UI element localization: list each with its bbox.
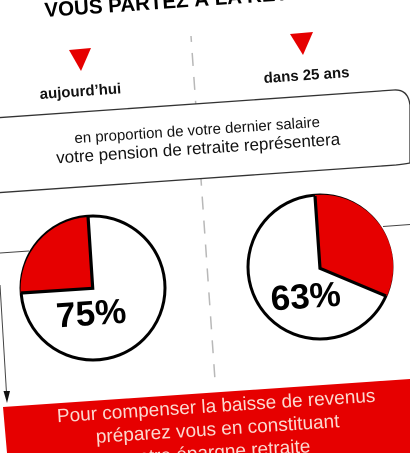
label: dans 25 ans: dans 25 ans (263, 64, 350, 87)
panel: pension proportion (0, 90, 410, 193)
value: 75%: 75% (55, 292, 128, 335)
text: pension line: votre pension de retraite représentera (56, 130, 341, 167)
icon: right red triangle (290, 32, 313, 55)
text: banner line 1: Pour compenser la baisse de revenus (56, 386, 376, 427)
label: aujourd'hui: aujourd’hui (39, 80, 122, 103)
banner: call to action (3, 379, 410, 453)
pie chart: 63% (248, 195, 393, 339)
text: proportion line: en proportion de votre dernier salaire (74, 114, 320, 147)
value: 63%: 63% (269, 275, 342, 318)
icon: left red triangle (69, 48, 91, 71)
text: banner line 2: préparez vous en constituant (95, 411, 341, 448)
pie chart: 75% (21, 216, 165, 360)
connector: left line and arrow (0, 251, 29, 403)
connector: right line (383, 224, 410, 226)
